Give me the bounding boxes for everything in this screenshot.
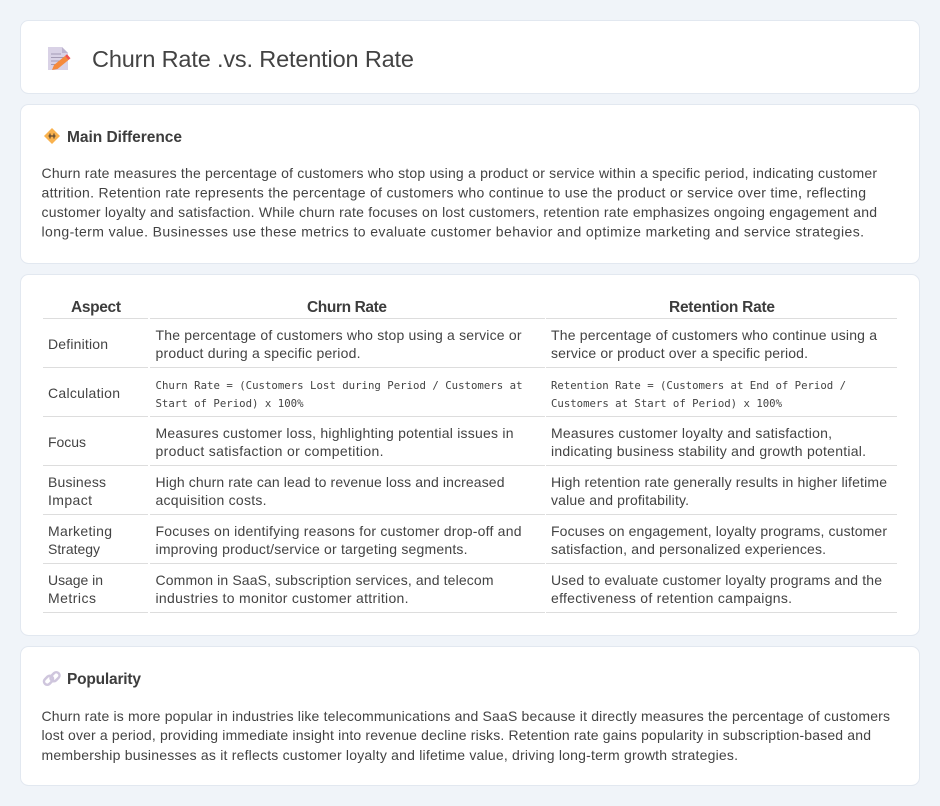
row: business impact: value and profitability. [551, 492, 689, 508]
table header row: Retention Rate [669, 299, 775, 316]
row: usage in metrics: industries to monitor customer attrition. [156, 590, 408, 606]
row: usage in metrics: effectiveness of retention campaigns. [551, 590, 792, 606]
row: focus [48, 425, 866, 459]
row: marketing strategy: Strategy [48, 541, 100, 557]
table header row [71, 299, 775, 316]
row: marketing strategy: improving product/service or targeting segments. [156, 541, 468, 557]
row: focus: indicating business stability and growth potential. [551, 443, 866, 459]
row: marketing strategy: Marketing [48, 523, 112, 539]
row: focus: Focus [48, 434, 86, 450]
text: popularity paragraph: membership businesses as it reflects customer loyalty and lifetime value, driving long-term growth strategies. [42, 747, 738, 763]
icon: chain link [43, 671, 61, 686]
text: main difference paragraph: long-term value. Businesses use these metrics to evaluate customer behavior and optimize marketing and service strategies. [42, 224, 864, 240]
row: marketing strategy: Focuses on identifying reasons for customer drop-off and [156, 523, 522, 539]
heading: main difference: Main Difference [67, 129, 182, 146]
row: usage in metrics: Used to evaluate customer loyalty programs and the [551, 572, 882, 588]
panel: popularity [20, 646, 920, 786]
text: main difference paragraph [42, 165, 877, 240]
panel: title header [20, 20, 920, 94]
row: calculation: Customers at Start of Period) x 100% [551, 397, 783, 410]
row: focus: Measures customer loyalty and satisfaction, [551, 425, 832, 441]
table header row: Churn Rate [307, 299, 387, 316]
row: definition: The percentage of customers who continue using a [551, 327, 877, 343]
row: business impact [48, 474, 887, 508]
row: marketing strategy: Focuses on engagement, loyalty programs, customer [551, 523, 887, 539]
panel: comparison table [20, 274, 920, 636]
row: focus: Measures customer loss, highlighting potential issues in [156, 425, 514, 441]
text: popularity paragraph: lost over a period, providing immediate insight into revenue decline risks. Retention rate gains popularity in subscription-based and [42, 727, 871, 743]
row: calculation: Churn Rate = (Customers Lost during Period / Customers at [156, 379, 522, 392]
text: popularity paragraph: Churn rate is more popular in industries like telecommunications and SaaS because it directly measures the percentage of customers [42, 708, 890, 724]
text: popularity paragraph [42, 708, 890, 763]
row: calculation [48, 379, 846, 410]
table header row: Aspect [71, 299, 121, 316]
title: Churn Rate .vs. Retention Rate [92, 46, 414, 72]
row: definition: The percentage of customers who stop using a service or [156, 327, 522, 343]
row: definition: product during a specific period. [156, 345, 360, 361]
row: business impact: Impact [48, 492, 92, 508]
text: main difference paragraph: attrition. Retention rate represents the percentage of customers who continue to use the product or service over time, reflecting [42, 184, 866, 200]
row: calculation: Calculation [48, 385, 120, 401]
panel: main difference [20, 104, 920, 264]
row: business impact: High churn rate can lead to revenue loss and increased [156, 474, 504, 490]
row: marketing strategy [48, 523, 887, 557]
text: main difference paragraph: Churn rate measures the percentage of customers who stop using a product or service within a specific period, indicating customer [42, 165, 877, 181]
icon: document with pencil [48, 47, 70, 70]
row: business impact: Business [48, 474, 106, 490]
row: business impact: High retention rate generally results in higher lifetime [551, 474, 887, 490]
heading: popularity: Popularity [67, 671, 141, 688]
row: calculation: Start of Period) x 100% [156, 397, 304, 410]
row: definition [48, 327, 877, 361]
row: marketing strategy: satisfaction, and personalized experiences. [551, 541, 826, 557]
row: definition: service or product over a specific period. [551, 345, 808, 361]
text: main difference paragraph: customer loyalty and satisfaction. While churn rate focuses on lost customers, retention rate emphasizes ongoing engagement and [42, 204, 877, 220]
row: usage in metrics: Metrics [48, 590, 96, 606]
row: business impact: acquisition costs. [156, 492, 266, 508]
row: usage in metrics: Common in SaaS, subscription services, and telecom [156, 572, 494, 588]
icon: orange diamond [44, 128, 60, 144]
row: usage in metrics [48, 572, 882, 606]
row: definition: Definition [48, 336, 108, 352]
row: usage in metrics: Usage in [48, 572, 103, 588]
row: calculation: Retention Rate = (Customers at End of Period / [551, 379, 846, 392]
row: focus: product satisfaction or competition. [156, 443, 384, 459]
